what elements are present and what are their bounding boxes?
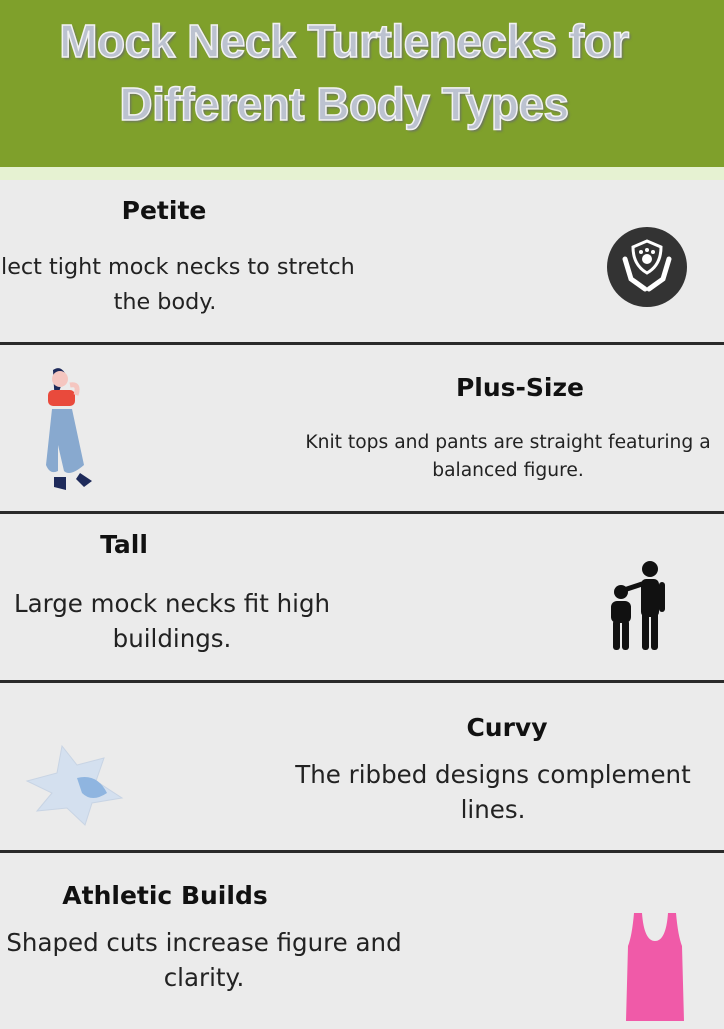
text: plus-size: Knit tops and pants are straight featuring a: [305, 432, 711, 453]
title: Mock Neck Turtlenecks for: [59, 15, 629, 67]
title: Different Body Types: [119, 78, 569, 130]
header: [0, 0, 724, 167]
icon: adult and child: [611, 561, 665, 650]
panel: petite: [1, 196, 687, 315]
text: curvy: The ribbed designs complement: [295, 760, 691, 789]
heading: tall: Tall: [100, 530, 148, 559]
heading: curvy: Curvy: [466, 713, 548, 742]
text: plus-size: balanced figure.: [432, 460, 584, 481]
icon: pink tank top: [626, 913, 684, 1021]
heading: petite: Petite: [122, 196, 206, 225]
panel: curvy: [26, 713, 691, 826]
text: athletic: [6, 928, 402, 992]
panel: athletic: [6, 881, 684, 1021]
text: tall: [14, 589, 330, 653]
icon: shield hands: [607, 227, 687, 307]
panel: plus-size: [46, 368, 711, 490]
text: plus-size: [305, 432, 711, 481]
text: athletic: Shaped cuts increase figure and: [6, 928, 402, 957]
title: [59, 15, 632, 132]
text: tall: Large mock necks fit high: [14, 589, 330, 618]
icon: star: [26, 745, 123, 826]
text: petite: [1, 254, 355, 315]
text: petite: the body.: [114, 289, 216, 315]
text: athletic: clarity.: [164, 963, 244, 992]
text: curvy: lines.: [461, 795, 525, 824]
panel: tall: [14, 530, 665, 653]
text: curvy: [295, 760, 691, 824]
heading: plus-size: Plus-Size: [456, 373, 584, 402]
heading: athletic builds: Athletic Builds: [62, 881, 268, 910]
text: tall: buildings.: [113, 624, 231, 653]
illustration: woman: [46, 368, 92, 490]
text: petite: lect tight mock necks to stretch: [1, 254, 355, 280]
